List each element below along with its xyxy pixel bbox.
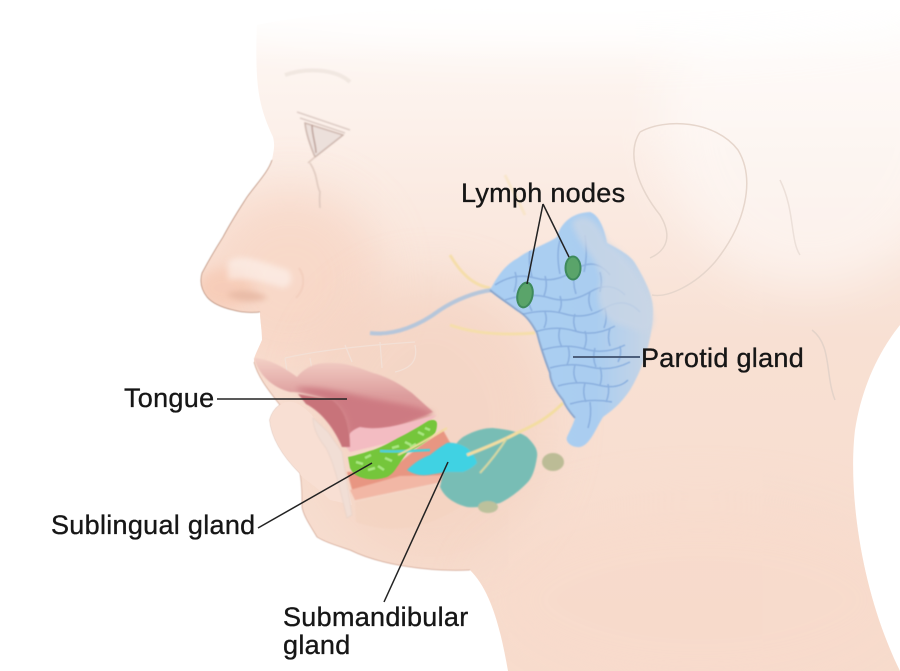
nostril wing <box>296 268 303 298</box>
mouth opening <box>254 358 437 518</box>
facial profile outline <box>201 160 470 570</box>
eye <box>285 70 350 208</box>
front teeth <box>313 418 352 518</box>
submandibular gland <box>398 403 564 513</box>
faded upper right part of gland <box>572 217 653 332</box>
lobules <box>495 235 640 428</box>
label: submandibular gland: gland <box>283 630 351 660</box>
nerves <box>450 175 535 334</box>
red shadow behind teeth <box>298 394 350 447</box>
tongue and palate interior <box>295 387 434 446</box>
jaw cutaway <box>347 430 470 529</box>
parotid gland <box>370 212 653 447</box>
nose <box>226 258 291 301</box>
lymph nodes <box>515 256 580 309</box>
floor of mouth pink band <box>346 415 437 452</box>
label: sublingual gland: Sublingual gland <box>51 510 255 540</box>
head and neck skin <box>180 0 900 671</box>
sublingual gland <box>348 420 437 479</box>
ear <box>634 124 835 400</box>
upper lip <box>254 358 433 443</box>
lower lip and chin <box>270 402 352 505</box>
gland front edge <box>490 290 575 418</box>
label: parotid gland: Parotid gland <box>641 343 804 373</box>
upper teeth outline <box>285 342 416 392</box>
label: tongue: Tongue <box>124 383 214 413</box>
label: lymph nodes: Lymph nodes <box>461 178 625 208</box>
leader lines <box>217 204 640 602</box>
label: submandibular gland: Submandibular <box>283 602 469 632</box>
